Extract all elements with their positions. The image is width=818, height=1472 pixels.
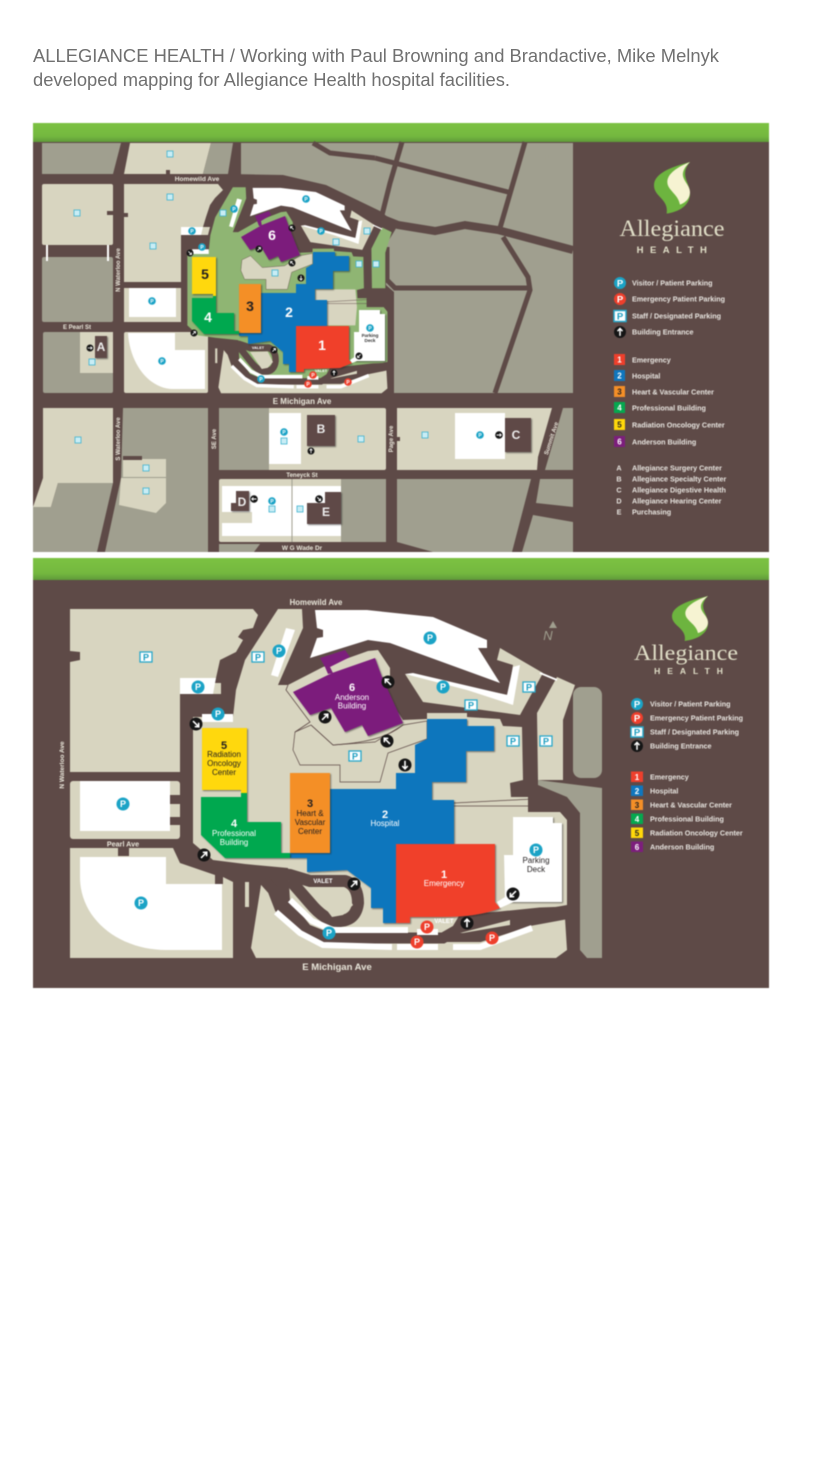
building: anderson building [241, 216, 300, 262]
legend: buildings: Hospital [650, 786, 678, 796]
legend: off-site facilities: D [616, 496, 622, 506]
icons: visitor parking: P [138, 898, 144, 908]
icons: emergency parking: P [489, 933, 495, 943]
icons: staff parking: P [526, 682, 532, 692]
street labels: Page Ave [389, 425, 395, 452]
icons: emergency parking: P [311, 373, 315, 379]
icons: visitor parking: P [440, 682, 446, 692]
building labels: Building [338, 702, 366, 710]
north arrow [543, 621, 557, 643]
parking deck [354, 310, 385, 361]
building labels: 3 [307, 798, 313, 810]
off-site building letters: A [97, 340, 106, 354]
street labels: Homewild Ave [290, 598, 343, 607]
legend: off-site facilities: C [616, 486, 622, 494]
legend: buildings: Radiation Oncology Center [650, 828, 743, 838]
icons: emergency parking [410, 920, 498, 948]
legend: parking and entrances: Emergency Patient Parking [650, 714, 743, 722]
icons: staff parking: P [255, 652, 261, 662]
building labels: 1 [441, 869, 447, 881]
title text: ALLEGIANCE HEALTH / Working with Paul Browning and Brandactive, Mike Melnyk [33, 45, 720, 66]
icons: emergency parking: P [306, 382, 310, 388]
icons: staff parking: P [468, 700, 474, 710]
off-site building letters: B [317, 422, 326, 436]
parking deck label: Parking [362, 333, 378, 338]
building: hospital [239, 252, 349, 372]
building labels: Anderson [335, 693, 369, 702]
logo: flame mark [672, 596, 708, 641]
icons: visitor parking: P [326, 928, 332, 938]
legend: off-site facilities: A [616, 464, 622, 472]
building labels: Building [220, 838, 248, 847]
street labels [63, 176, 560, 552]
icons: staff parking [140, 652, 552, 762]
street labels: Summit Ave [544, 421, 560, 456]
legend: off-site facilities: Allegiance Hearing Center [632, 496, 722, 506]
parking deck [504, 817, 562, 902]
legend: buildings: Emergency [650, 772, 689, 782]
building labels: 5 [221, 740, 227, 752]
green header bar [33, 123, 769, 142]
legend: off-site facilities [616, 464, 726, 516]
legend: buildings [631, 772, 743, 852]
legend: parking and entrances: P [634, 728, 641, 738]
logo: wordmark: HEALTH [637, 245, 713, 256]
legend: buildings: 3 [617, 388, 622, 396]
title text [33, 45, 720, 90]
off-site buildings [95, 336, 531, 524]
legend: buildings: Anderson Building [632, 438, 696, 446]
icons: visitor parking: P [427, 633, 433, 643]
street labels: E Pearl St [63, 325, 91, 331]
street labels: N Waterloo Ave [59, 741, 66, 789]
logo: wordmark: HEALTH [654, 666, 730, 676]
parking deck label: Deck [365, 338, 376, 343]
legend: buildings: Heart & Vascular Center [650, 800, 732, 810]
legend: off-site facilities: Allegiance Digestive Health [632, 486, 726, 494]
legend: parking and entrances: P [617, 294, 624, 306]
street labels: Pearl Ave [107, 840, 139, 848]
north arrow: N [544, 155, 550, 162]
icons: emergency parking: P [424, 922, 430, 932]
panel background [33, 580, 769, 988]
building: anderson annex [320, 650, 350, 674]
legend: parking and entrances: Building Entrance [650, 742, 712, 750]
legend: parking and entrances: Building Entrance [632, 328, 694, 336]
building labels: Center [298, 827, 322, 836]
icons: staff parking: P [143, 652, 149, 662]
icons: visitor parking [148, 195, 484, 505]
icons: staff parking: P [352, 752, 358, 762]
icons: visitor parking: P [232, 207, 236, 213]
building numbers: 6 [268, 227, 276, 243]
street labels: SE Ave [212, 428, 218, 449]
legend: parking and entrances: Visitor / Patient Parking [650, 700, 731, 708]
surrounding blocks [70, 609, 602, 958]
deck connector [497, 892, 518, 908]
panel: detailed hospital map [33, 558, 769, 988]
panel background [33, 142, 769, 552]
street labels: Homewild Ave [175, 176, 220, 183]
valet labels [252, 346, 328, 373]
panel: campus overview map [33, 123, 769, 552]
building labels: Oncology [207, 759, 241, 768]
building labels: 6 [349, 682, 355, 694]
off-site building letters: E [322, 505, 330, 519]
building labels: Deck [527, 865, 546, 874]
building labels: 2 [382, 809, 388, 821]
street labels: E Michigan Ave [302, 962, 372, 973]
street labels: W G Wade Dr [282, 545, 323, 552]
legend: buildings: 4 [635, 815, 640, 824]
legend: off-site facilities: Allegiance Surgery Center [632, 464, 722, 472]
building: professional building [192, 296, 239, 334]
icons: visitor parking: P [160, 359, 164, 365]
legend: parking and entrances: Emergency Patient Parking [632, 294, 725, 304]
icons: visitor parking: P [282, 430, 286, 436]
surrounding city blocks [33, 142, 573, 552]
legend: parking and entrances: Visitor / Patient Parking [632, 278, 713, 288]
building labels: Center [212, 768, 236, 777]
legend: parking and entrances: P [634, 700, 641, 710]
legend: parking and entrances: P [617, 312, 624, 322]
street labels: S Waterloo Ave [116, 417, 122, 461]
legend: buildings: Anderson Building [650, 842, 714, 852]
valet labels [313, 879, 454, 925]
icons: visitor parking: P [270, 499, 274, 505]
legend: buildings: 4 [617, 404, 622, 412]
deck connector [350, 354, 362, 363]
building numbers: 2 [285, 304, 293, 320]
legend: buildings: 1 [617, 356, 622, 364]
legend: off-site facilities: B [616, 474, 622, 484]
building: radiation oncology center [202, 728, 247, 793]
off-site building letters: C [512, 428, 521, 442]
icons: visitor parking: P [195, 682, 201, 692]
building: emergency [296, 326, 352, 372]
building labels: Hospital [371, 819, 400, 828]
title text: developed mapping for Allegiance Health hospital facilities. [33, 69, 510, 90]
icons: emergency parking: P [414, 937, 420, 947]
legend: buildings: 2 [617, 372, 622, 380]
logo: wordmark: Allegiance [620, 216, 724, 241]
building: heart and vascular center [239, 284, 261, 333]
building: hospital [290, 719, 494, 923]
icons: visitor parking: P [368, 326, 372, 332]
street labels [59, 598, 372, 973]
icons: visitor parking: P [120, 799, 126, 809]
street labels: E Michigan Ave [273, 397, 332, 406]
legend: parking and entrances: P [617, 278, 624, 290]
courtyard outline [286, 685, 403, 745]
street labels: Teneyck St [286, 473, 318, 479]
building: professional building [201, 793, 290, 858]
building labels: Emergency [424, 879, 464, 888]
legend: off-site facilities: E [617, 508, 622, 516]
legend: parking and entrances: P [634, 714, 641, 724]
legend: parking and entrances [631, 698, 743, 752]
building numbers: 4 [204, 309, 212, 325]
icons: visitor parking: P [259, 377, 263, 383]
legend: buildings: 5 [635, 829, 640, 838]
icons: building entrances [86, 223, 503, 504]
legend: buildings: Emergency [632, 356, 671, 364]
legend: buildings [614, 354, 725, 447]
legend: parking and entrances: Staff / Designated Parking [632, 312, 721, 320]
legend: buildings: 1 [635, 773, 640, 782]
building labels: Heart & [296, 809, 324, 818]
icons: visitor parking: P [215, 709, 221, 719]
icons: visitor parking: P [319, 229, 323, 235]
valet labels: VALET [313, 879, 333, 885]
logo: flame mark [654, 162, 690, 214]
valet labels: VALET [434, 919, 454, 925]
building: radiation oncology center [192, 257, 216, 296]
north arrow [544, 148, 550, 162]
hospital campus site [193, 609, 575, 958]
legend: buildings: 2 [635, 787, 640, 796]
icons: visitor parking: P [150, 299, 154, 305]
building: anderson annex [255, 211, 271, 226]
legend: buildings: 3 [635, 801, 640, 810]
legend: buildings: Professional Building [650, 814, 724, 824]
building: heart and vascular center [290, 773, 330, 853]
building numbers: 1 [318, 337, 326, 353]
green header bar [33, 558, 769, 580]
logo: wordmark [620, 216, 724, 256]
icons: staff parking [74, 151, 428, 512]
valet labels: VALET [315, 369, 328, 373]
street labels: N Waterloo Ave [116, 248, 122, 292]
building labels: Professional [212, 829, 256, 838]
building numbers: 5 [201, 266, 209, 282]
hospital campus site [187, 187, 392, 393]
icons: emergency parking: P [346, 380, 350, 386]
legend: buildings: 6 [635, 843, 640, 852]
icons: emergency parking [304, 371, 352, 388]
icons: visitor parking: P [533, 845, 539, 855]
logo: wordmark: Allegiance [634, 640, 738, 665]
legend: buildings: Heart & Vascular Center [632, 388, 714, 396]
legend: buildings: 6 [617, 438, 622, 446]
building labels: 4 [231, 818, 238, 830]
building numbers: 3 [246, 298, 254, 314]
icons: visitor parking: P [304, 197, 308, 203]
legend: off-site facilities: Allegiance Specialty Center [632, 474, 726, 484]
icons: staff parking: P [543, 736, 549, 746]
icons: visitor parking: P [478, 433, 482, 439]
building: anderson building [293, 658, 403, 736]
building: emergency [396, 844, 500, 923]
building labels: Vascular [295, 818, 326, 827]
legend: parking and entrances [614, 277, 725, 338]
off-site building letters [97, 340, 521, 519]
legend: buildings: 5 [617, 420, 622, 430]
icons: building entrances [187, 673, 522, 930]
building labels: Radiation [207, 750, 241, 759]
legend: buildings: Professional Building [632, 404, 706, 412]
legend: buildings: Hospital [632, 372, 660, 380]
north arrow: N [543, 628, 553, 643]
legend: buildings: Radiation Oncology Center [632, 420, 725, 430]
icons: staff parking: P [510, 736, 516, 746]
icons: visitor parking: P [276, 646, 282, 656]
legend: parking and entrances: Staff / Designated Parking [650, 728, 739, 736]
logo: wordmark [634, 640, 738, 676]
building labels [207, 682, 550, 888]
building numbers [201, 227, 326, 353]
valet labels: VALET [252, 346, 265, 350]
icons: visitor parking [116, 632, 542, 940]
off-site building letters: D [238, 495, 247, 509]
icons: visitor parking: P [200, 245, 204, 251]
legend: off-site facilities: Purchasing [632, 508, 671, 516]
icons: visitor parking: P [190, 229, 194, 235]
road barriers [47, 245, 108, 261]
building labels: Parking [522, 856, 550, 865]
